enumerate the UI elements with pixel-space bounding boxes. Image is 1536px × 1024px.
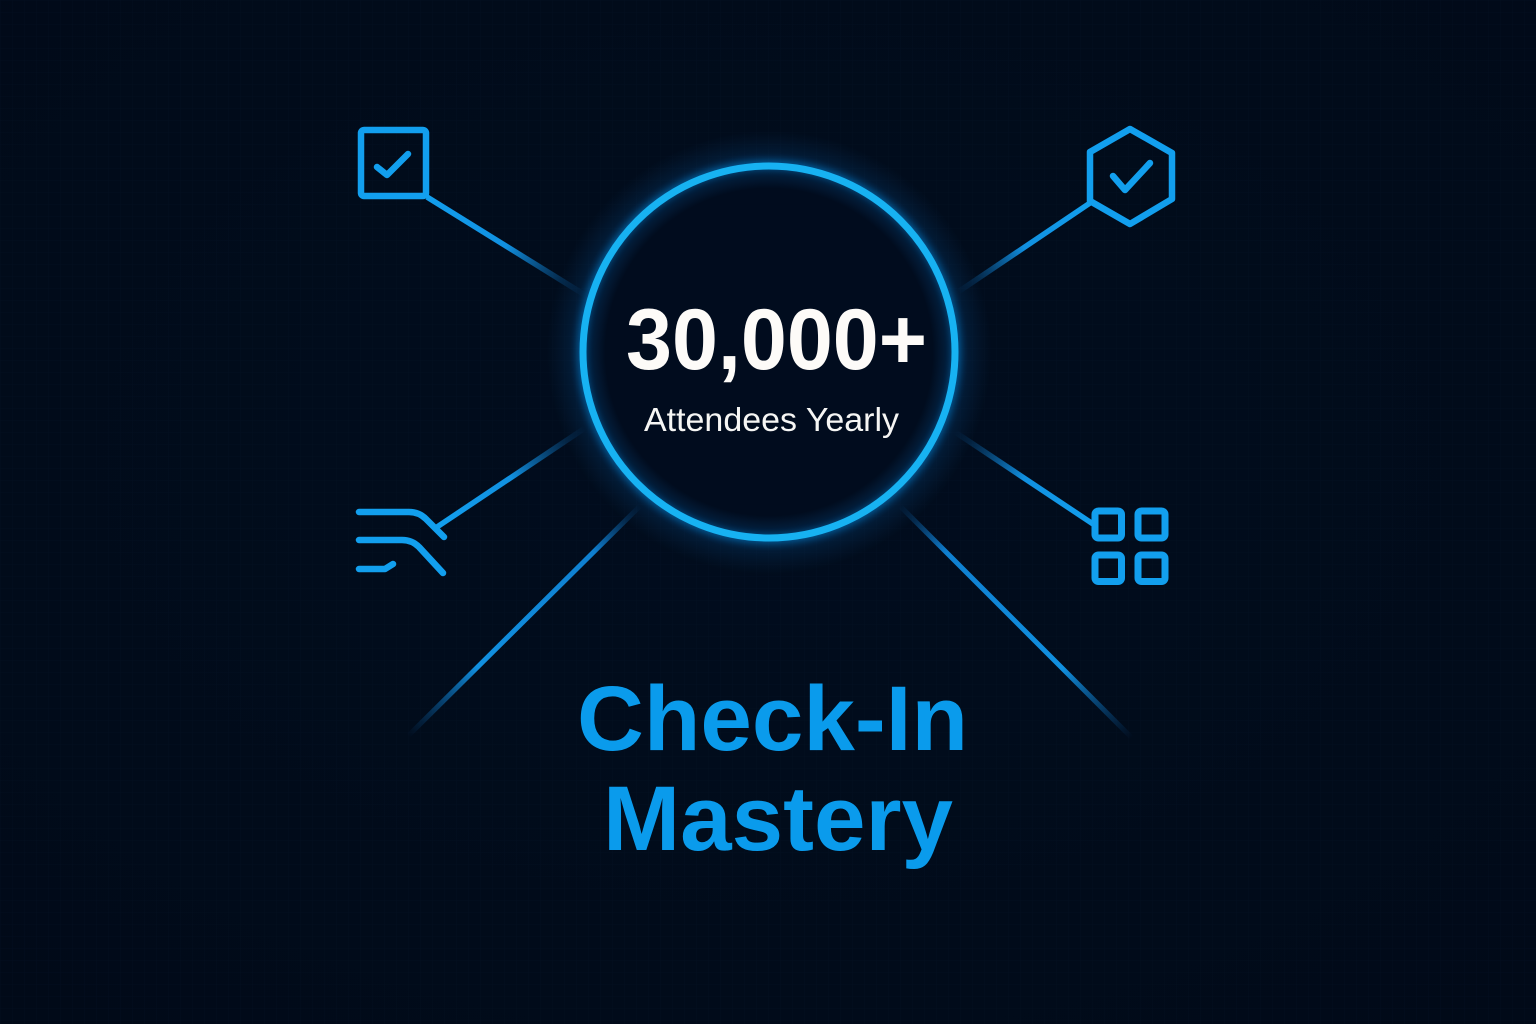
connector: bottom-right [900, 506, 1132, 738]
icon: hexagon check [1090, 129, 1172, 224]
icon: grid of four squares [1095, 511, 1165, 582]
connector: top-left [427, 197, 585, 295]
central circle [547, 130, 991, 574]
title [577, 668, 968, 870]
icon: checkbox [361, 130, 426, 196]
title: Check-In [577, 668, 968, 770]
statistic label: Attendees Yearly [644, 401, 900, 438]
title: Mastery [603, 768, 953, 870]
connector: middle-left [437, 428, 585, 527]
icon: flow lines [359, 512, 444, 573]
connector: top-right [958, 203, 1090, 292]
connector: middle-right [955, 432, 1093, 524]
statistic: 30,000+: 30,000+ [626, 292, 927, 388]
connector: bottom-left [408, 506, 640, 736]
